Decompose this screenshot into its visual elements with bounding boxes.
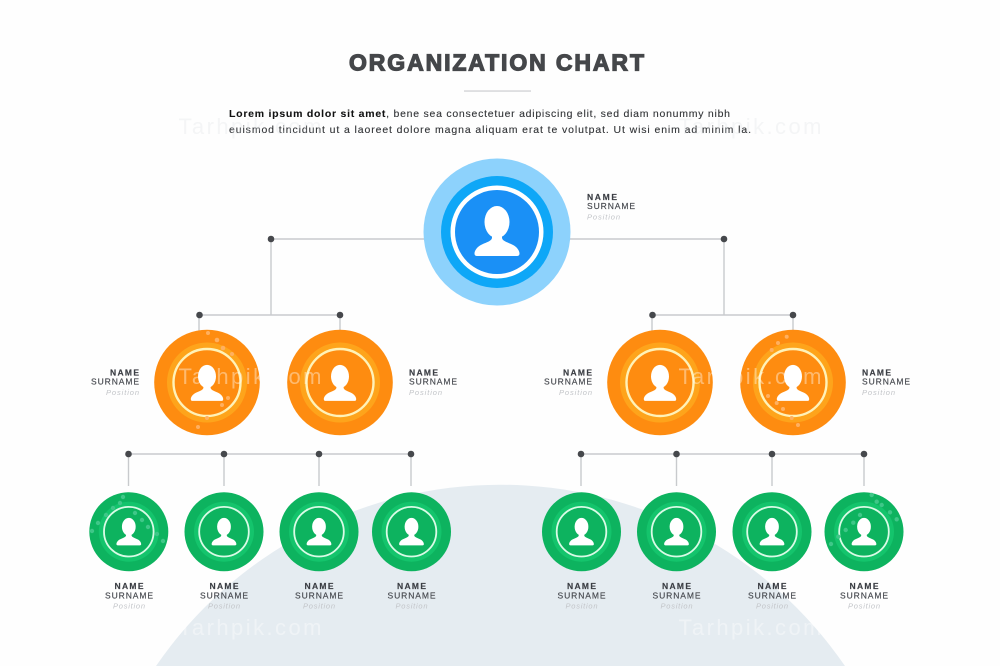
- staff 5 label: SURNAME: [558, 590, 606, 600]
- staff 7 label: NAME: [758, 581, 787, 591]
- connector lines: left team: [125, 451, 414, 486]
- staff 4 label: Position: [396, 602, 428, 610]
- manager 3: orange avatar: [607, 330, 713, 435]
- top node: blue avatar: [424, 158, 570, 306]
- top node label: Position: [587, 212, 620, 222]
- staff 7 label: Position: [756, 602, 788, 610]
- background hump: [156, 485, 845, 666]
- manager 4 label: Position: [862, 388, 895, 397]
- top node label: [587, 192, 635, 222]
- manager 4 label: SURNAME: [862, 376, 910, 386]
- watermarks: Tarhpik.com: [678, 615, 822, 640]
- staff 6 label: NAME: [662, 581, 691, 591]
- staff 1 label: NAME: [114, 581, 144, 591]
- watermarks: [178, 114, 822, 640]
- staff 2 label: [200, 581, 248, 610]
- staff 4: green avatar: [372, 492, 451, 571]
- staff 1 label: Position: [113, 602, 145, 610]
- intro text: Lorem ipsum dolor sit amet, bene sea consectetuer adipiscing elit, sed diam nonummy nibh: [229, 108, 730, 120]
- staff 2 label: NAME: [210, 581, 239, 591]
- watermarks: Tarhpik.com: [678, 364, 822, 389]
- staff 1 label: [105, 581, 153, 610]
- staff 4 label: SURNAME: [388, 590, 436, 600]
- staff 3 label: Position: [303, 602, 335, 610]
- staff 2 label: SURNAME: [200, 590, 248, 600]
- manager 2 label: Position: [409, 388, 442, 397]
- manager 4: orange avatar: [740, 330, 846, 435]
- staff 6 label: SURNAME: [652, 590, 701, 600]
- staff 5 label: Position: [566, 602, 598, 610]
- manager 2 label: [409, 368, 457, 397]
- watermarks: Tarhpik.com: [678, 114, 822, 139]
- staff 7 label: [748, 581, 796, 610]
- staff 5: green avatar: [542, 492, 621, 571]
- staff 2 label: Position: [208, 602, 240, 610]
- title divider: [464, 90, 531, 92]
- manager 3 label: [544, 368, 592, 397]
- staff 1: green avatar: [89, 492, 168, 571]
- watermarks: Tarhpik.com: [178, 114, 322, 139]
- manager 2: orange avatar: [287, 330, 393, 435]
- staff 8 label: Position: [848, 602, 880, 610]
- staff 2: green avatar: [184, 492, 264, 571]
- staff 4 label: NAME: [397, 581, 426, 591]
- manager 3 label: SURNAME: [544, 376, 592, 386]
- title: ORGANIZATION CHART: [349, 50, 644, 76]
- staff 3 label: NAME: [304, 581, 334, 591]
- manager 4 label: [862, 368, 910, 397]
- staff 7 label: SURNAME: [748, 590, 796, 600]
- staff 8 label: SURNAME: [840, 590, 888, 600]
- staff 3: green avatar: [280, 492, 358, 571]
- connector lines: level one: [196, 236, 796, 331]
- watermarks: Tarhpik.com: [178, 364, 322, 389]
- staff 6 label: [652, 581, 701, 610]
- staff 5 label: [558, 581, 606, 610]
- connector lines: right team: [578, 451, 867, 486]
- manager 2 label: NAME: [409, 368, 438, 378]
- staff 3 label: SURNAME: [295, 590, 343, 600]
- staff 5 label: NAME: [567, 581, 596, 591]
- staff 8 label: [840, 581, 888, 610]
- top node label: NAME: [587, 192, 617, 202]
- watermarks: Tarhpik.com: [178, 615, 322, 640]
- top node label: SURNAME: [587, 201, 635, 211]
- manager 1 label: Position: [106, 388, 139, 397]
- manager 3 label: Position: [559, 388, 592, 397]
- manager 1: orange avatar: [154, 330, 260, 435]
- manager 1 label: NAME: [110, 368, 139, 378]
- manager 4 label: NAME: [862, 368, 891, 378]
- staff 6 label: Position: [660, 602, 692, 610]
- manager 1 label: [91, 368, 139, 397]
- staff 4 label: [388, 581, 436, 610]
- manager 1 label: SURNAME: [91, 376, 139, 386]
- staff 1 label: SURNAME: [105, 590, 153, 600]
- staff 6: green avatar: [637, 492, 716, 571]
- manager 3 label: NAME: [563, 368, 592, 378]
- staff 8: green avatar: [824, 492, 904, 571]
- staff 7: green avatar: [732, 492, 812, 571]
- staff 8 label: NAME: [850, 581, 879, 591]
- manager 2 label: SURNAME: [409, 376, 457, 386]
- intro text: [229, 108, 751, 136]
- staff 3 label: [295, 581, 343, 610]
- intro text: euismod tincidunt ut a laoreet dolore magna aliquam erat te volutpat. Ut wisi enim ad minim la.: [229, 124, 751, 136]
